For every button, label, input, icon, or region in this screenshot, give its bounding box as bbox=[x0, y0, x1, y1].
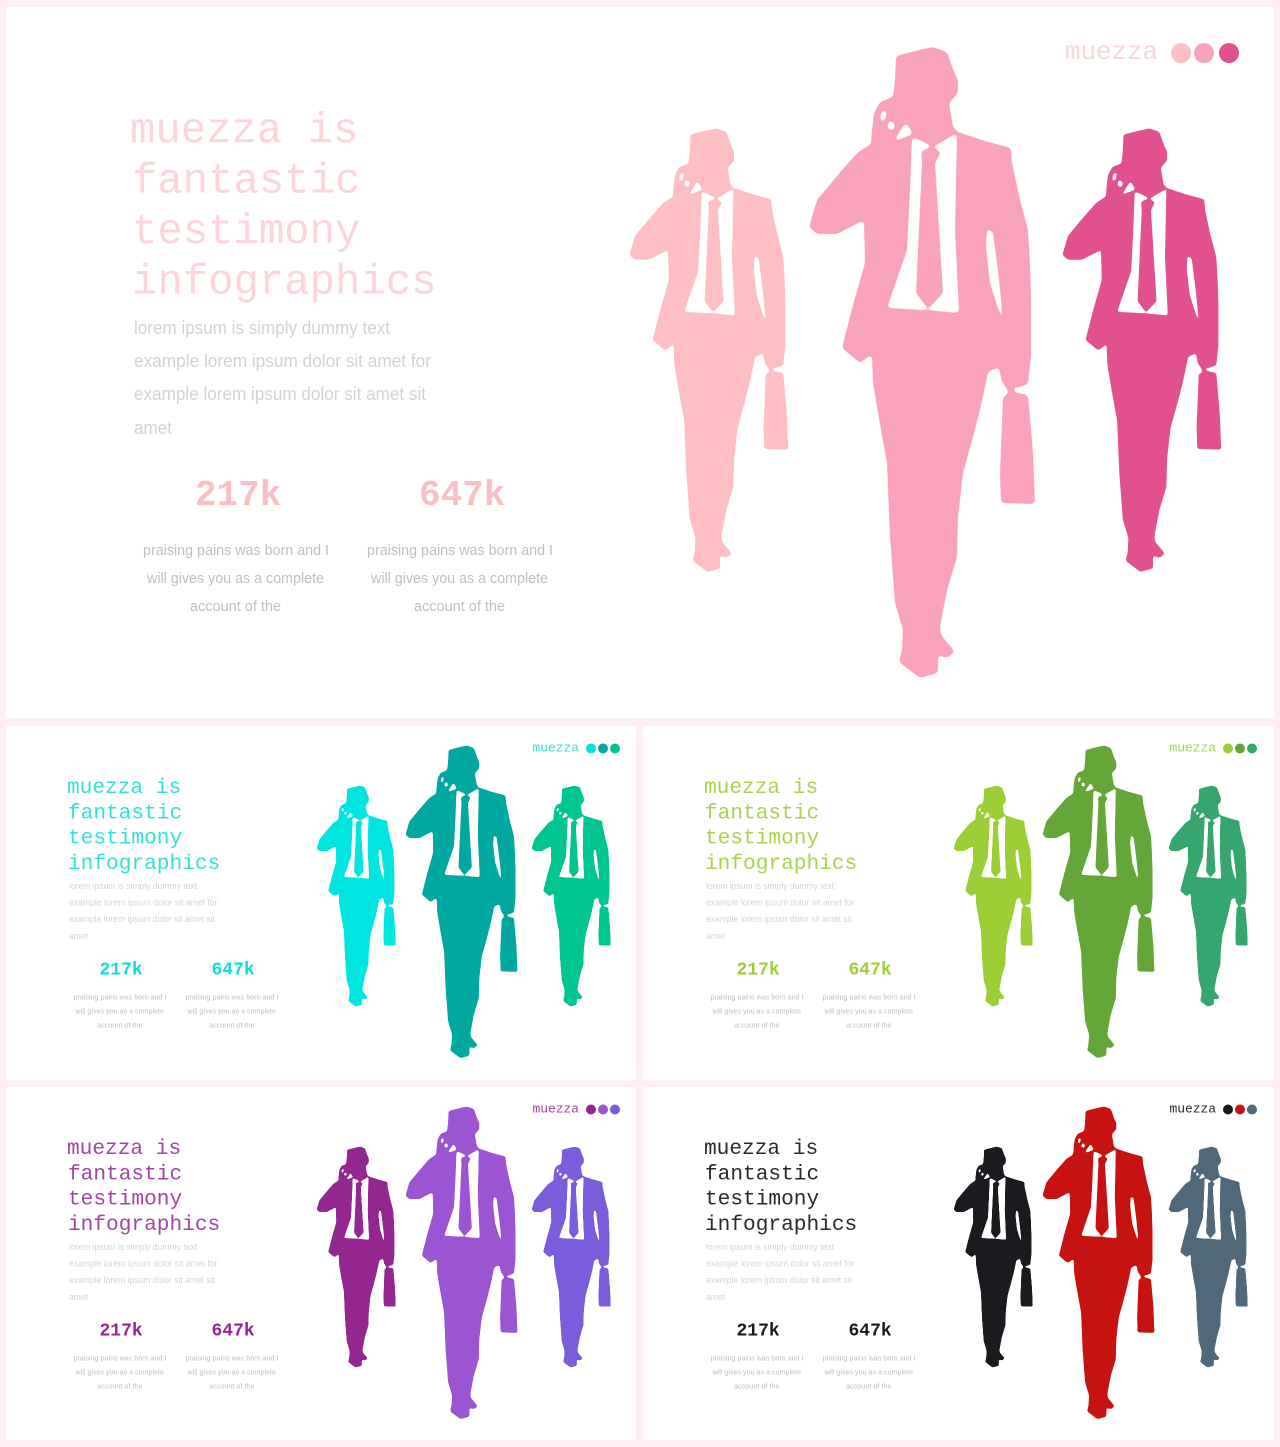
text block: dark: example lorem ipsum dolor sit amet sit bbox=[706, 1275, 852, 1285]
text block: green: 217k bbox=[736, 960, 780, 980]
text block: teal: testimony bbox=[68, 826, 182, 850]
stat description left: account of the bbox=[190, 598, 281, 615]
panel: pink main bbox=[6, 7, 1274, 718]
text block: dark: muezza bbox=[1170, 1102, 1216, 1116]
stat: 217k: 217k bbox=[195, 475, 281, 516]
text block: purple: account of the bbox=[209, 1382, 254, 1390]
text block: teal: muezza bbox=[532, 740, 579, 756]
silhouette: center red bbox=[1042, 1106, 1154, 1419]
text block: dark: account of the bbox=[846, 1382, 892, 1390]
text block: dark: 647k bbox=[848, 1322, 892, 1342]
text block: green: testimony bbox=[705, 826, 819, 850]
text block: purple: lorem ipsum is simply dummy text bbox=[69, 1242, 197, 1252]
text block: teal: praising pains was born and I bbox=[186, 992, 278, 1002]
text block: teal: will gives you as a complete bbox=[75, 1006, 164, 1016]
text block: dark: 217k bbox=[736, 1322, 780, 1342]
text block: green bbox=[704, 740, 1216, 1030]
text block: purple: praising pains was born and I bbox=[74, 1354, 166, 1362]
stat description right bbox=[367, 542, 553, 615]
silhouette: left purple bbox=[317, 1147, 396, 1368]
body text: amet bbox=[134, 418, 172, 438]
text block: green: muezza is bbox=[704, 776, 818, 800]
text block: green: infographics bbox=[705, 852, 857, 876]
text block: teal: amet bbox=[69, 931, 88, 941]
title: muezza is bbox=[130, 107, 358, 155]
silhouette: center green bbox=[1042, 745, 1154, 1058]
panel: green bbox=[643, 726, 1274, 1080]
text block: dark: will gives you as a complete bbox=[824, 1368, 913, 1376]
text block: green: will gives you as a complete bbox=[712, 1006, 801, 1016]
silhouette: left green bbox=[954, 786, 1033, 1006]
text block: purple: muezza is bbox=[67, 1137, 181, 1161]
stat description left bbox=[143, 542, 329, 615]
stat: 647k: 647k bbox=[419, 475, 505, 516]
silhouette: right businessman bbox=[1062, 128, 1221, 572]
text block: teal: infographics bbox=[68, 852, 220, 876]
text block: teal: 647k bbox=[212, 960, 255, 980]
text block: teal: muezza is bbox=[67, 776, 181, 800]
text block: teal: account of the bbox=[97, 1020, 142, 1030]
text block: purple bbox=[67, 1102, 579, 1390]
text block: dark: lorem ipsum is simply dummy text bbox=[706, 1242, 834, 1252]
text block: purple: will gives you as a complete bbox=[187, 1368, 276, 1376]
text block: dark: example lorem ipsum dolor sit amet for bbox=[706, 1258, 854, 1268]
text block: dark: will gives you as a complete bbox=[712, 1368, 801, 1376]
stat description right: will gives you as a complete bbox=[370, 570, 548, 587]
logo dots: dark bbox=[1223, 1104, 1257, 1114]
logo: muezza: muezza bbox=[1065, 37, 1158, 67]
silhouette: center teal bbox=[405, 745, 517, 1058]
silhouette: right slate bbox=[1169, 1147, 1248, 1368]
text block: purple: fantastic bbox=[68, 1162, 182, 1186]
text block: green: lorem ipsum is simply dummy text bbox=[706, 881, 834, 891]
text block: teal: will gives you as a complete bbox=[187, 1006, 276, 1016]
silhouette: left teal bbox=[317, 786, 396, 1006]
text block: green: 647k bbox=[848, 960, 892, 980]
text block: green: account of the bbox=[846, 1020, 892, 1030]
silhouette: center businessman bbox=[809, 47, 1035, 678]
text block: purple: will gives you as a complete bbox=[75, 1368, 164, 1376]
text block: teal: praising pains was born and I bbox=[74, 992, 166, 1002]
logo dots: green bbox=[1223, 744, 1257, 754]
text block: green: praising pains was born and I bbox=[822, 992, 916, 1002]
text block: teal: 217k bbox=[100, 960, 143, 980]
text block: teal: example lorem ipsum dolor sit amet for bbox=[69, 898, 218, 908]
text block: purple: testimony bbox=[68, 1188, 182, 1212]
text block: green: will gives you as a complete bbox=[824, 1006, 913, 1016]
text block: green: amet bbox=[706, 931, 725, 941]
text block: purple: 217k bbox=[100, 1322, 143, 1342]
text block: purple: example lorem ipsum dolor sit amet for bbox=[69, 1258, 218, 1268]
silhouette: left businessman bbox=[629, 128, 788, 572]
text block: dark: muezza is bbox=[704, 1137, 818, 1161]
body text: example lorem ipsum dolor sit amet sit bbox=[134, 384, 426, 404]
text block: green: praising pains was born and I bbox=[710, 992, 804, 1002]
text block: purple: muezza bbox=[532, 1102, 579, 1116]
text block: dark bbox=[704, 1102, 1216, 1390]
text block: dark: account of the bbox=[734, 1382, 780, 1390]
silhouette: left black bbox=[954, 1147, 1033, 1368]
text block: dark: praising pains was born and I bbox=[710, 1354, 804, 1362]
logo: muezza bbox=[1065, 37, 1239, 67]
text block: purple: amet bbox=[69, 1292, 88, 1302]
text block: green: example lorem ipsum dolor sit amet for bbox=[706, 898, 854, 908]
text block: teal bbox=[67, 740, 579, 1030]
silhouette: right purple bbox=[532, 1147, 611, 1368]
body text bbox=[134, 318, 431, 438]
stat description left: praising pains was born and I bbox=[143, 542, 329, 559]
body text: lorem ipsum is simply dummy text bbox=[134, 318, 390, 338]
silhouette: center purple bbox=[405, 1106, 517, 1419]
text block: green: example lorem ipsum dolor sit amet sit bbox=[706, 914, 852, 924]
text block: purple: example lorem ipsum dolor sit amet sit bbox=[69, 1275, 215, 1285]
stat description right: account of the bbox=[414, 598, 505, 615]
text block: teal: example lorem ipsum dolor sit amet sit bbox=[69, 914, 215, 924]
panel: purple bbox=[6, 1087, 636, 1440]
text block: teal: lorem ipsum is simply dummy text bbox=[69, 881, 197, 891]
title: fantastic bbox=[132, 158, 360, 206]
panel: dark and red bbox=[643, 1087, 1274, 1440]
stat description right: praising pains was born and I bbox=[367, 542, 553, 559]
logo dots: purple bbox=[586, 1104, 620, 1114]
text block: dark: amet bbox=[706, 1292, 725, 1302]
text block: purple: 647k bbox=[212, 1322, 255, 1342]
text block: dark: fantastic bbox=[705, 1162, 819, 1186]
silhouette: right teal bbox=[532, 786, 611, 1006]
text block: dark: testimony bbox=[705, 1188, 819, 1212]
text block: teal: fantastic bbox=[68, 801, 182, 825]
silhouette: right green bbox=[1169, 786, 1248, 1006]
body text: example lorem ipsum dolor sit amet for bbox=[134, 351, 431, 371]
text block: dark: praising pains was born and I bbox=[822, 1354, 916, 1362]
stat description left: will gives you as a complete bbox=[146, 570, 324, 587]
text block: purple: infographics bbox=[68, 1213, 220, 1237]
title: testimony bbox=[132, 208, 360, 256]
text block: teal: account of the bbox=[209, 1020, 254, 1030]
text block: green: muezza bbox=[1170, 740, 1216, 756]
text block: green: account of the bbox=[734, 1020, 780, 1030]
text block: dark: infographics bbox=[705, 1213, 857, 1237]
text block: green: fantastic bbox=[705, 801, 819, 825]
text block: purple: account of the bbox=[97, 1382, 142, 1390]
logo dots: teal bbox=[586, 744, 620, 754]
panel: teal bbox=[6, 726, 636, 1080]
text block: purple: praising pains was born and I bbox=[186, 1354, 278, 1362]
title: infographics bbox=[132, 258, 437, 306]
